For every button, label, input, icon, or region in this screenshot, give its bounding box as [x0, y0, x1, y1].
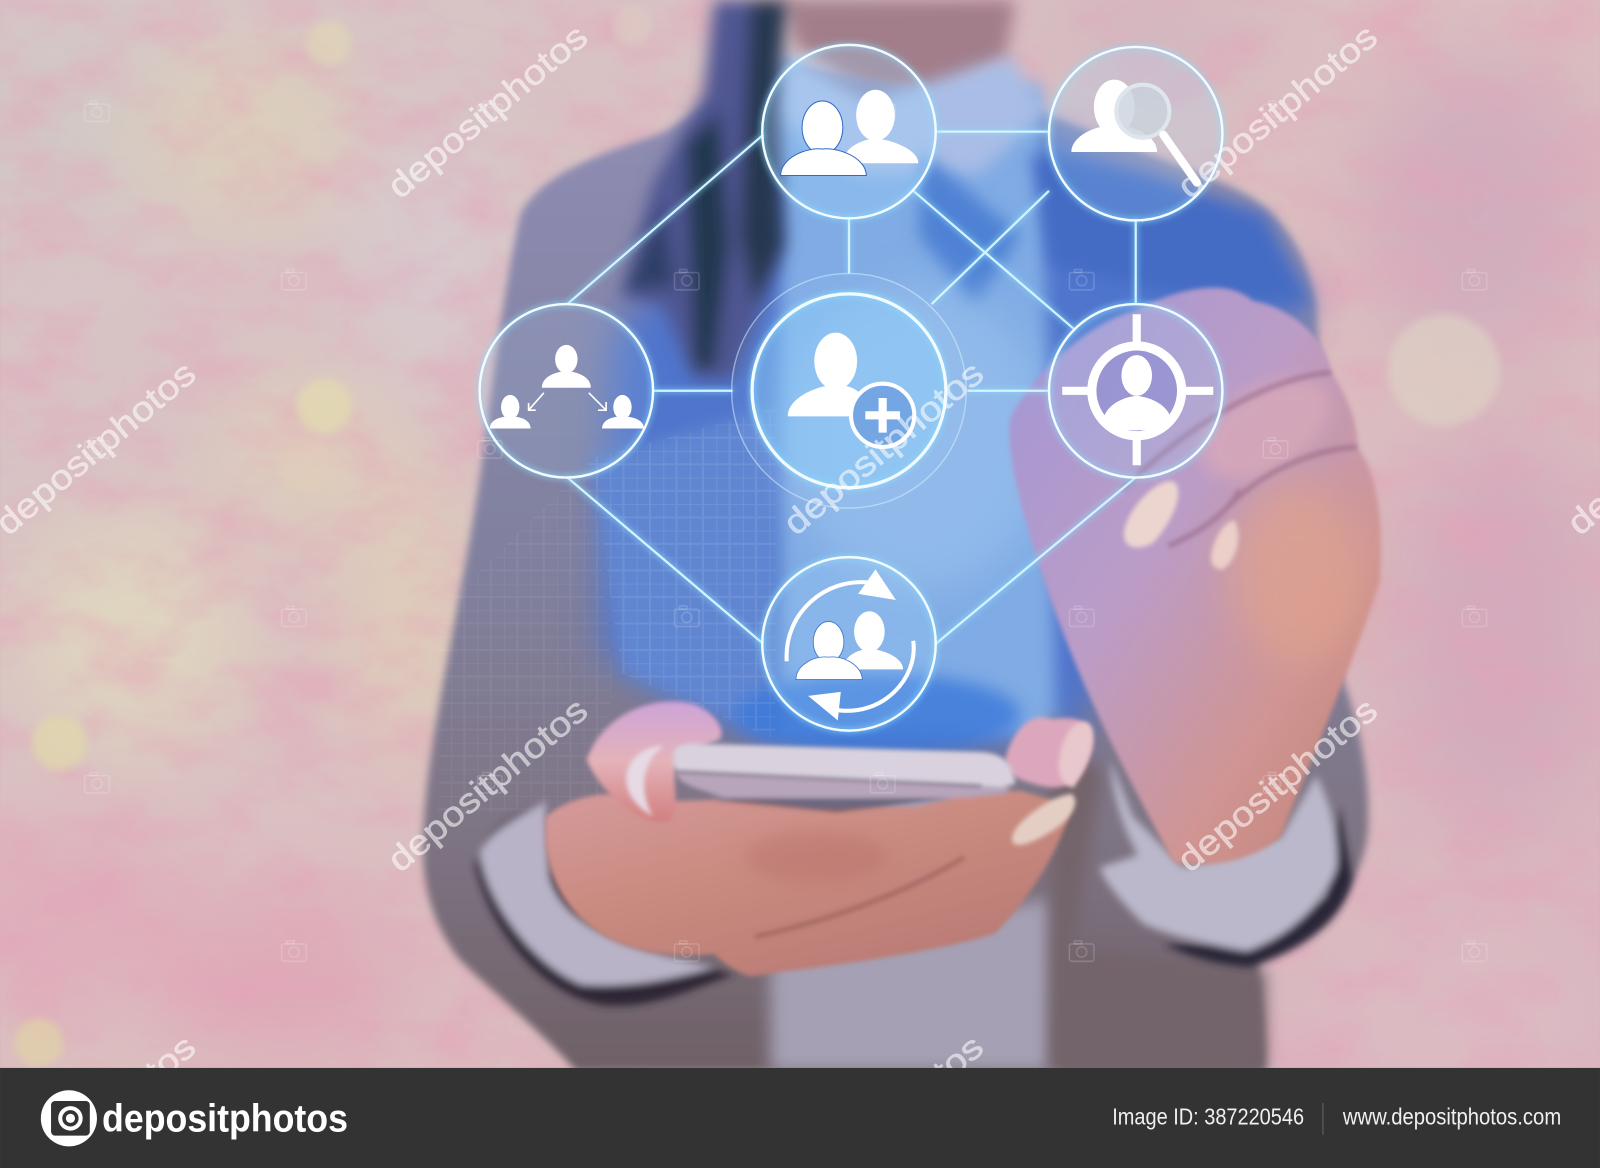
- icon: magnifying glass: [1116, 85, 1197, 183]
- node: team of two people (top centre): [762, 45, 936, 218]
- nail: middle: [1211, 520, 1238, 569]
- smartphone: [673, 744, 1015, 812]
- watermark: diagonal depositphotos text: depositphotos: [1171, 691, 1385, 880]
- website url: www.depositphotos.com: [1342, 1103, 1561, 1129]
- icon: arrows: [529, 393, 606, 410]
- figure: neck: [786, 0, 1015, 97]
- icon: plus badge: [851, 384, 914, 447]
- icon: person: [1071, 80, 1157, 152]
- watermark: diagonal depositphotos text: depositphotos: [1171, 18, 1385, 206]
- figure: left hand: [545, 701, 1093, 977]
- icon: circular arrows: [787, 569, 914, 720]
- figure: shirt cuffs: [476, 760, 1352, 1006]
- icon: top person: [542, 345, 591, 388]
- icon: person: [788, 333, 867, 416]
- icon: depositphotos logo: [41, 1090, 97, 1146]
- node: add user (centre): [732, 273, 966, 508]
- node: hierarchy of three people (left): [480, 304, 653, 478]
- watermark: small camera marks: [85, 101, 1487, 961]
- icon: front person: [781, 101, 866, 176]
- node: target user (right): [959, 304, 1367, 478]
- watermark: diagonal depositphotos text: depositphotos: [381, 691, 595, 880]
- figure: right hand holding stylus: [1009, 288, 1381, 865]
- icon: lower-right person: [602, 395, 644, 429]
- watermark: diagonal depositphotos text: depositphotos: [777, 354, 991, 543]
- figure: blue-tinted shirt and plaid: [439, 46, 1311, 1071]
- figure: hair: [620, 0, 788, 380]
- node: person search (top right): [1049, 47, 1222, 220]
- icon: target reticle: [1062, 314, 1213, 465]
- nail: index: [1124, 481, 1178, 548]
- icon: back person: [843, 611, 903, 669]
- watermark: diagonal depositphotos text: depositphotos: [381, 18, 595, 206]
- image id: Image ID: 387220546: [1112, 1103, 1304, 1129]
- lens flare: [959, 330, 1367, 335]
- icon: person: [1103, 355, 1171, 430]
- logo wordmark: depositphotos: [102, 1098, 348, 1141]
- icon: front person: [796, 621, 862, 680]
- icon: back person: [843, 90, 918, 163]
- node: team rotation (bottom): [762, 557, 936, 731]
- icon: lower-left person: [490, 395, 531, 429]
- footer bar: [0, 1068, 1600, 1168]
- figure: jacket: [423, 61, 1368, 1071]
- network connector lines: [567, 132, 1136, 644]
